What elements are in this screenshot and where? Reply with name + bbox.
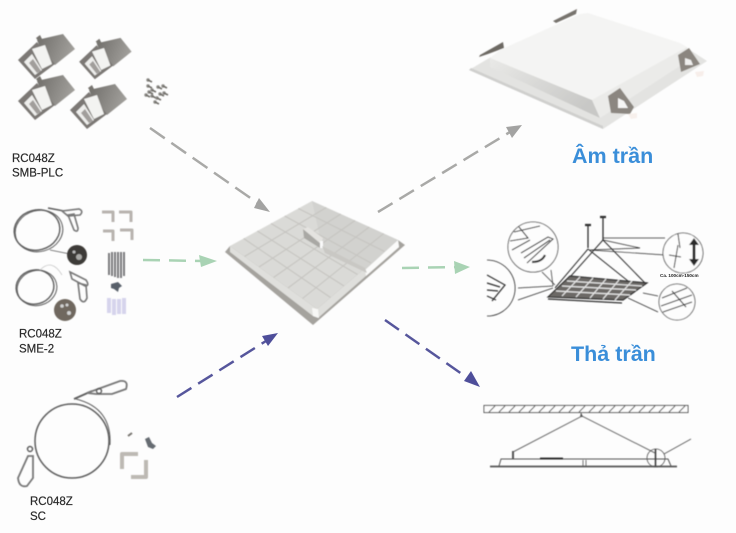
label: RC048Z SME-2: SME-2 (19, 344, 54, 356)
label: RC048Z SME-2: RC048Z (19, 328, 62, 340)
icon: single suspension wire with hooks (18, 381, 127, 486)
detail circle left (487, 260, 515, 316)
hatched ceiling (484, 406, 688, 412)
label: RC048Z SC: RC048Z (30, 496, 73, 508)
suspension wires (555, 240, 645, 288)
illustration: recessed mounted panel (469, 9, 707, 129)
central LED panel (225, 201, 405, 325)
panel top face (230, 201, 398, 309)
fixture flange (469, 50, 707, 129)
arrow: green, panel to suspended mounting (402, 261, 470, 274)
rear clips (553, 9, 577, 23)
front clip (608, 88, 634, 114)
panel grid (548, 276, 647, 303)
label: RC048Z SMB-PLC: SMB-PLC (12, 168, 63, 180)
icon: screws (144, 78, 168, 104)
panel profile (490, 451, 677, 466)
leader lines (518, 238, 665, 312)
driver box (303, 229, 322, 248)
heading: Âm trần: Âm trần (572, 143, 653, 168)
detail circle bottom right (659, 284, 695, 320)
fixture side walls (490, 58, 600, 118)
label: RC048Z SC: SC (30, 511, 46, 523)
illustration: suspended mounting diagram (487, 217, 703, 320)
dimension caption: Ca. 100cm-150cm (660, 273, 699, 278)
panel body side (230, 240, 399, 318)
hanging wires (513, 416, 655, 453)
panel flange (225, 240, 405, 325)
icon: suspension wire set two (12, 265, 88, 321)
label: RC048Z SMB-PLC: RC048Z (12, 153, 55, 165)
detail circle right (663, 233, 703, 273)
arrow: purple, panel to surface mounting (385, 320, 480, 387)
arrow: purple, SC to panel (177, 333, 278, 397)
fixture top (490, 13, 687, 100)
ceiling rods (588, 217, 603, 248)
accessory group: RC048Z SMB-PLC (12, 34, 168, 180)
icon: suspension wire set one (10, 205, 87, 265)
icon: four strap buckles (18, 34, 132, 129)
detail circle and leader (647, 439, 691, 467)
icon: L brackets and screws (122, 433, 156, 477)
arrow: green, SME-2 to panel (143, 255, 217, 267)
arrow: grey, SMB-PLC to panel (150, 128, 270, 212)
accessory group: RC048Z SME-2 (10, 205, 132, 356)
heading: Thả trần: Thả trần (571, 342, 656, 366)
accessory group: RC048Z SC (18, 381, 156, 523)
right clip (678, 48, 700, 72)
detail circle top left (508, 222, 558, 272)
illustration: wire hung side-view diagram (484, 406, 691, 467)
icon: brackets, screws, wall plugs (102, 212, 132, 315)
arrow: grey, panel to recessed mounting (378, 125, 522, 212)
